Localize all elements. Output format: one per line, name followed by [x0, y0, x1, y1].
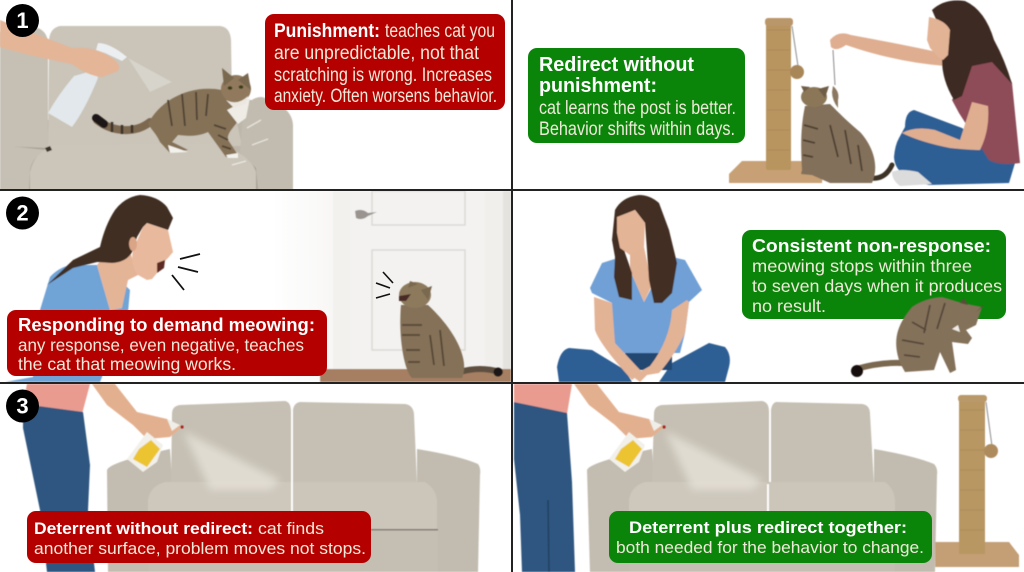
loveseat — [587, 401, 937, 572]
woman with deterrent bottle — [514, 384, 666, 572]
cat meow lines — [376, 272, 393, 298]
panel 5: deterrent without redirect scene — [23, 384, 480, 572]
scratching post with ball — [729, 18, 824, 183]
number badge 3: 3 — [16, 394, 29, 418]
door and wall background — [319, 191, 511, 382]
number badge 1 — [6, 4, 39, 37]
callout: punishment: are unpredictable, not that — [274, 43, 480, 64]
callout: deterrent without redirect: Deterrent without redirect: — [34, 519, 253, 538]
callout: deterrent without redirect: cat finds — [258, 519, 324, 538]
callout: consistent non-response: meowing stops within three — [752, 256, 972, 276]
grooming cat overlapping green callout — [851, 297, 985, 377]
callout: punishment: Punishment: — [274, 21, 380, 42]
callout: deterrent without redirect — [27, 511, 371, 563]
panel 2: redirect without punishment scene — [729, 0, 1020, 186]
number badge 1: 1 — [16, 8, 29, 33]
shouting woman — [5, 195, 173, 382]
sofa with scratched arm — [0, 26, 293, 190]
callout: responding to demand meowing — [7, 310, 327, 376]
callout: deterrent plus redirect together — [609, 511, 932, 563]
scratching post with ball — [935, 395, 1019, 567]
woman with deterrent bottle — [23, 384, 184, 572]
spray mist — [665, 431, 762, 490]
callout: punishment: anxiety. Often worsens behavior. — [274, 86, 497, 107]
woman shout lines — [172, 254, 200, 290]
callout: redirect without punishment: cat learns the post is better. — [539, 98, 736, 119]
callout: consistent non-response: to seven days when it produces — [752, 276, 1002, 296]
panel 3: demand meowing scene — [5, 191, 511, 382]
panel 6: deterrent plus redirect scene — [514, 384, 1019, 572]
number badge 2 — [6, 196, 39, 230]
callout: punishment: scratching is wrong. Increases — [274, 65, 492, 86]
callout: redirect without punishment — [528, 48, 745, 143]
arm and hand holding spray bottle — [0, 20, 172, 127]
callout: redirect without punishment: Behavior shifts within days. — [539, 119, 735, 140]
loveseat — [107, 401, 480, 572]
meowing cat — [399, 281, 502, 378]
callout: punishment — [265, 14, 505, 110]
callout: redirect without punishment: Redirect without — [539, 54, 694, 76]
callout: consistent non-response: no result. — [752, 296, 826, 316]
callout: responding to demand meowing: any response, even negative, teaches — [18, 335, 304, 355]
callout: consistent non-response: Consistent non-response: — [752, 235, 991, 256]
callout: consistent non-response — [742, 230, 1006, 319]
callout: deterrent plus redirect together: both needed for the behavior to change. — [616, 538, 924, 557]
spray mist — [183, 431, 280, 490]
number badge 2: 2 — [16, 200, 29, 226]
callout: deterrent without redirect: another surface, problem moves not stops. — [34, 539, 366, 558]
tabby cat looking back — [96, 68, 251, 158]
sitting woman looking away — [557, 195, 730, 382]
callout: deterrent plus redirect together: Deterrent plus redirect together: — [629, 518, 907, 537]
panel 1: punishment scene — [0, 20, 293, 190]
woman dangling toy — [830, 0, 1020, 186]
panel 4: consistent non-response scene — [557, 195, 730, 382]
tabby cat sitting, looking at toy — [801, 86, 892, 183]
callout: punishment: teaches cat you — [385, 21, 495, 42]
number badge 3 — [6, 390, 39, 422]
callout: responding to demand meowing: Responding to demand meowing: — [18, 315, 315, 335]
callout: redirect without punishment: punishment: — [539, 75, 657, 97]
callout: responding to demand meowing: the cat that meowing works. — [18, 354, 236, 374]
